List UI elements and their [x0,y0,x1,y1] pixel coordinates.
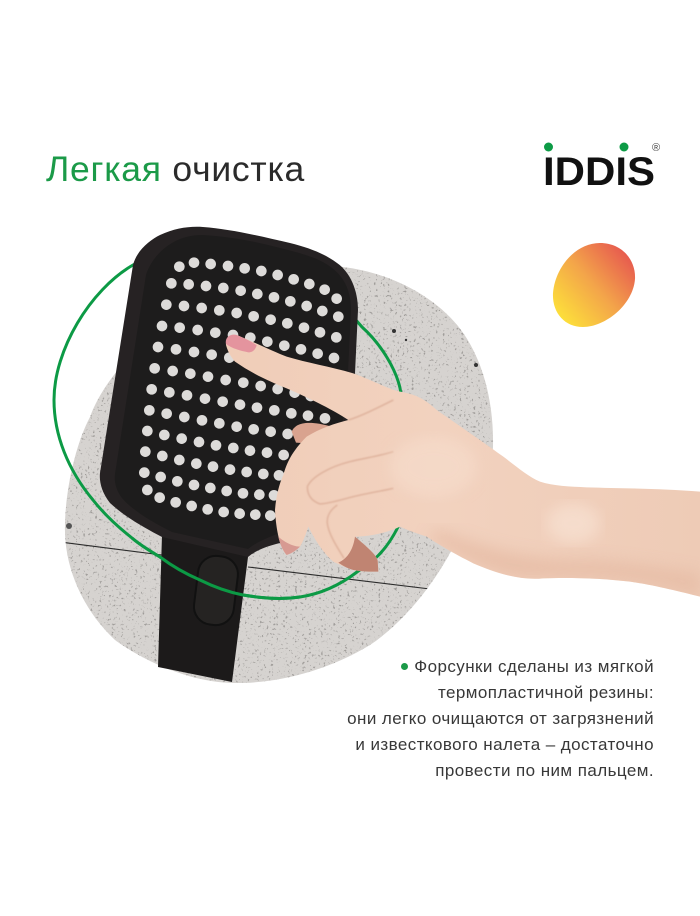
head body [100,227,358,557]
logo: IDDIS: ® [652,142,660,154]
creases [307,400,393,558]
description text: термопластичной резины: [438,683,654,702]
lower finger shadow [338,537,378,572]
head face [115,235,351,549]
skin shading clipped to the hand [398,447,698,595]
fingertip nail lower [278,537,300,555]
pink nail [226,335,257,352]
nozzles [139,257,344,521]
green arc over handle [132,538,300,598]
description text: и известкового налета – достаточно [355,735,654,754]
description text: они легко очищаются от загрязнений [347,709,654,728]
lower shadow on arm [427,530,700,597]
description text: Форсунки сделаны из мягкой [414,657,654,676]
title: Легкая очистка [46,149,305,189]
hand [226,335,700,597]
highlight on wrist [547,503,600,543]
shower head [100,227,358,682]
handle [158,535,250,682]
stone texture circle [60,260,500,690]
description text [347,657,654,780]
slider button [192,554,240,627]
green circle outline [54,249,406,598]
gradient blob [553,243,635,327]
description text: провести по ним пальцем. [435,761,654,780]
illustration: shower head and hand [52,142,700,683]
highlight on knuckle [398,447,466,486]
hand silhouette [226,335,700,597]
thumb behind [292,423,332,443]
logo: IDDIS: IDDIS [543,150,655,194]
